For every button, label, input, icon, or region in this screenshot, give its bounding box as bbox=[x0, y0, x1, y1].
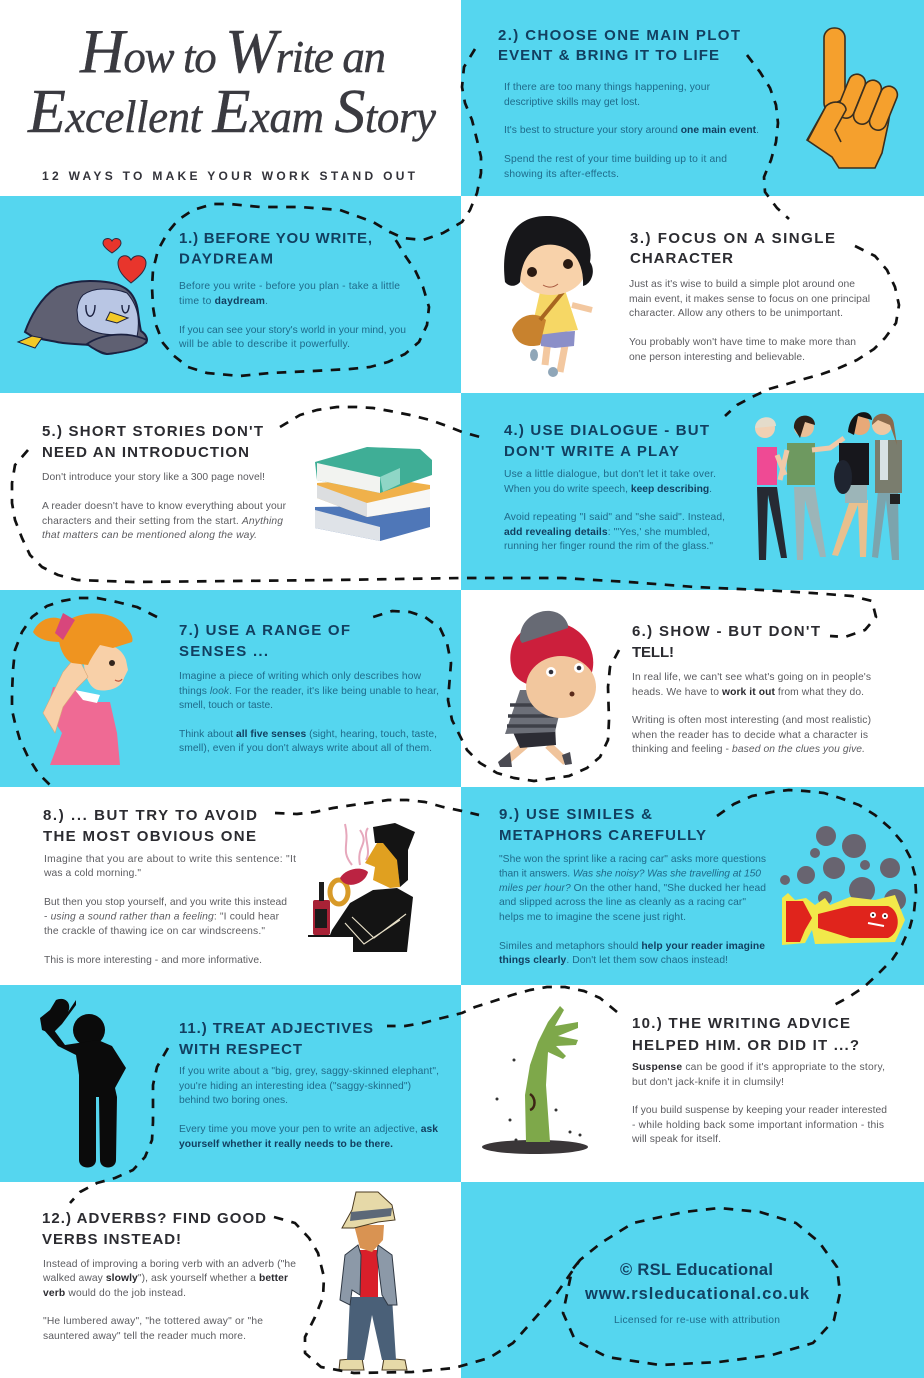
panel: 12 adverbs bbox=[0, 1182, 461, 1378]
panel: 7 range of senses bbox=[0, 590, 461, 787]
icon: sleeping penguin with hearts bbox=[18, 239, 147, 354]
text block 1: Before you write - before you plan - take a little bbox=[179, 281, 400, 292]
heading 1 bbox=[179, 230, 372, 268]
heading 10: HELPED HIM. OR DID IT ...? bbox=[632, 1037, 859, 1054]
panel: 10 writing advice bbox=[461, 985, 924, 1182]
heading 7: 7.) USE A RANGE OF bbox=[179, 622, 350, 639]
heading 3: 3.) FOCUS ON A SINGLE bbox=[630, 230, 835, 247]
text block 11: If you write about a "big, grey, saggy-skinned elephant", bbox=[179, 1066, 439, 1077]
heading 8 bbox=[43, 807, 257, 845]
text block 8: Imagine that you are about to write this sentence: "It bbox=[44, 854, 296, 865]
text block 12: Instead of improving a boring verb with an adverb ("he bbox=[43, 1259, 296, 1270]
icon: man smelling wine bbox=[308, 823, 415, 952]
text block 8: This is more interesting - and more informative. bbox=[44, 955, 262, 966]
heading 5 bbox=[42, 423, 263, 461]
text block 6: thinking and feeling - based on the clues you give. bbox=[632, 744, 865, 755]
text block 5 bbox=[42, 472, 287, 541]
heading 8: THE MOST OBVIOUS ONE bbox=[43, 828, 256, 845]
panel: 4 use dialogue bbox=[461, 393, 924, 590]
heading 10 bbox=[632, 1015, 859, 1054]
text block 11 bbox=[179, 1066, 439, 1150]
icon: man in hat bbox=[339, 1192, 407, 1370]
text block 1 bbox=[178, 281, 406, 350]
text block 9: miles per hour? On the other hand, "She ducked her head bbox=[499, 883, 766, 894]
icon: girl listening bbox=[33, 613, 133, 765]
text block 5: A reader doesn't have to know everything about your bbox=[42, 501, 287, 512]
text block 3: character. Allow any others to be unimportant. bbox=[629, 308, 843, 319]
text block 11: yourself whether it really needs to be there. bbox=[179, 1139, 393, 1150]
icon: pointing hand bbox=[807, 28, 900, 168]
text block 9: "She won the sprint like a racing car" asks more questions bbox=[499, 854, 766, 865]
text block 2: descriptive skills may get lost. bbox=[504, 97, 640, 108]
text block 1: If you can see your story's world in your mind, you bbox=[179, 325, 406, 336]
text block 10: but don't jack-knife it in clumsily! bbox=[632, 1077, 784, 1088]
text block 5: that matters can be mentioned along the way. bbox=[42, 530, 257, 541]
heading 11: 11.) TREAT ADJECTIVES bbox=[179, 1020, 373, 1037]
heading 7: SENSES ... bbox=[179, 643, 268, 660]
heading 5: NEED AN INTRODUCTION bbox=[42, 444, 249, 461]
heading 8: 8.) ... BUT TRY TO AVOID bbox=[43, 807, 257, 824]
text block 3: You probably won't have time to make more than bbox=[629, 337, 856, 348]
text block 7: smell), even if you don't always write about all of them. bbox=[179, 743, 432, 754]
icon: sneaking boy bbox=[498, 611, 596, 767]
heading 7 bbox=[179, 622, 350, 660]
text block 12: verb would do the job instead. bbox=[43, 1288, 186, 1299]
text block 9: Similes and metaphors should help your reader imagine bbox=[499, 941, 765, 952]
text block 10 bbox=[631, 1062, 887, 1145]
text block 9: than it answers. Was she noisy? Was she travelling at 150 bbox=[499, 868, 761, 880]
panel: 1 before you write bbox=[0, 196, 461, 393]
text block 7: Think about all five senses (sight, hearing, touch, taste, bbox=[179, 729, 437, 740]
heading 3 bbox=[630, 230, 835, 267]
text block 6: In real life, we can't see what's going on in people's bbox=[632, 672, 871, 683]
icon: girl with bag bbox=[504, 216, 593, 377]
credit: licence note: Licensed for re-use with attribution bbox=[614, 1315, 780, 1326]
text block 6: Writing is often most interesting (and most realistic) bbox=[632, 715, 871, 726]
heading 6 bbox=[632, 623, 820, 661]
text block 10: Suspense can be good if it's appropriate to the story, bbox=[632, 1062, 885, 1073]
text block 3: main event, it makes sense to focus on one principal bbox=[629, 294, 870, 305]
heading 9 bbox=[499, 806, 706, 844]
panel: 11 treat adjectives with respect bbox=[0, 985, 461, 1182]
text block 8 bbox=[43, 854, 296, 966]
heading 1: 1.) BEFORE YOU WRITE, bbox=[179, 230, 372, 247]
text block 6: when the reader has to decide what a character is bbox=[631, 730, 868, 741]
heading 12: VERBS INSTEAD! bbox=[42, 1231, 181, 1248]
credit: website: www.rsleducational.co.uk bbox=[584, 1285, 810, 1303]
icon: man raising hat bbox=[40, 999, 126, 1168]
text block 1: will be able to describe it powerfully. bbox=[178, 339, 350, 350]
title bbox=[27, 18, 436, 146]
text block 11: behind two boring ones. bbox=[179, 1095, 288, 1106]
title: Excellent Exam Story bbox=[27, 78, 436, 146]
text block 5: Don't introduce your story like a 300 page novel! bbox=[42, 472, 265, 483]
panel: 5 short stories bbox=[0, 393, 461, 590]
text block 10: If you build suspense by keeping your reader interested bbox=[632, 1105, 887, 1116]
heading 1: DAYDREAM bbox=[179, 250, 273, 268]
text block 7: Imagine a piece of writing which only describes how bbox=[179, 671, 422, 682]
icon: zombie hand rising bbox=[482, 1006, 588, 1154]
text block 4: When you do write speech, keep describing. bbox=[504, 484, 712, 495]
text block 6 bbox=[631, 672, 871, 755]
text block 4: Use a little dialogue, but don't let it take over. bbox=[504, 469, 716, 480]
heading 6: 6.) SHOW - BUT DON'T bbox=[632, 623, 820, 640]
text block 9: and slipped across the line as cleanly as a racing car" bbox=[499, 897, 746, 908]
text block 9: helps me to imagine the scene just right. bbox=[499, 912, 686, 923]
credit: copyright: © RSL Educational bbox=[620, 1261, 773, 1279]
panel: 2 choose one main plot event bbox=[461, 0, 924, 196]
subtitle: 12 WAYS TO MAKE YOUR WORK STAND OUT bbox=[42, 169, 416, 183]
text block 10: will speak for itself. bbox=[631, 1134, 721, 1145]
text block 3: one person interesting and believable. bbox=[629, 352, 805, 363]
heading 11: WITH RESPECT bbox=[179, 1041, 302, 1058]
text block 2: If there are too many things happening, your bbox=[504, 82, 711, 93]
text block 12: sauntered away" tell the reader much more. bbox=[43, 1331, 246, 1342]
panel: title bbox=[0, 0, 461, 196]
text block 8: the crackle of thawing ice on car windscreens." bbox=[44, 926, 265, 937]
heading 9: METAPHORS CAREFULLY bbox=[499, 827, 706, 844]
text block 4: add revealing details: "'Yes,' she mumbled, bbox=[504, 527, 710, 538]
panel: 9 similes and metaphors bbox=[461, 787, 924, 985]
heading 9: 9.) USE SIMILES & bbox=[499, 806, 652, 823]
heading 4: 4.) USE DIALOGUE - BUT bbox=[504, 422, 709, 439]
text block 12: "He lumbered away", "he tottered away" or "he bbox=[43, 1316, 263, 1327]
text block 5: characters and their setting from the start. Anything bbox=[42, 516, 283, 527]
text block 4: Avoid repeating "I said" and "she said". Instead, bbox=[504, 512, 725, 523]
text block 9: things clearly. Don't let them sow chaos instead! bbox=[499, 955, 728, 966]
heading 3: CHARACTER bbox=[630, 250, 733, 267]
heading 11 bbox=[179, 1020, 373, 1058]
text block 10: - while holding back some important information - this bbox=[632, 1120, 884, 1131]
heading 2: EVENT & BRING IT TO LIFE bbox=[498, 47, 719, 64]
text block 3: Just as it's wise to build a simple plot around one bbox=[629, 279, 855, 290]
text block 8: was a cold morning." bbox=[43, 868, 141, 879]
heading 6: TELL! bbox=[632, 644, 674, 661]
title: How to Write an bbox=[79, 18, 386, 86]
panel: credits bbox=[461, 1182, 924, 1378]
heading 5: 5.) SHORT STORIES DON'T bbox=[42, 423, 263, 440]
heading 12 bbox=[42, 1210, 266, 1248]
text block 11: you're hiding an interesting idea ("saggy-skinned") bbox=[179, 1081, 411, 1092]
text block 4: running her finger round the rim of the glass." bbox=[504, 541, 713, 552]
text block 7: smell, touch or taste. bbox=[179, 700, 273, 711]
heading 12: 12.) ADVERBS? FIND GOOD bbox=[42, 1210, 266, 1227]
text block 7 bbox=[179, 671, 439, 754]
text block 3 bbox=[629, 279, 870, 363]
panel: 3 focus on a single character bbox=[461, 196, 924, 393]
text block 12 bbox=[42, 1259, 296, 1342]
text block 2: showing its after-effects. bbox=[504, 169, 619, 180]
text block 2 bbox=[504, 82, 759, 180]
panel: 8 avoid the most obvious one bbox=[0, 787, 461, 985]
icon: burning bomb and smoke bbox=[780, 826, 906, 945]
heading 4 bbox=[504, 422, 709, 460]
heading 10: 10.) THE WRITING ADVICE bbox=[632, 1015, 850, 1032]
text block 8: But then you stop yourself, and you write this instead bbox=[44, 897, 287, 908]
text block 9 bbox=[499, 854, 766, 966]
icon: four women talking bbox=[755, 412, 902, 560]
text block 1: time to daydream. bbox=[179, 296, 268, 307]
text block 4 bbox=[504, 469, 725, 552]
text block 2: Spend the rest of your time building up to it and bbox=[504, 154, 727, 165]
text block 12: walked away slowly"), ask yourself whether a better bbox=[42, 1273, 288, 1284]
heading 2: 2.) CHOOSE ONE MAIN PLOT bbox=[498, 27, 740, 44]
text block 6: heads. We have to work it out from what they do. bbox=[632, 687, 864, 698]
icon: stack of books bbox=[315, 447, 432, 541]
heading 2 bbox=[498, 27, 740, 64]
panel: 6 show but don't tell bbox=[461, 590, 924, 787]
text block 2: It's best to structure your story around one main event. bbox=[504, 125, 759, 136]
text block 7: things look. For the reader, it's like being unable to hear, bbox=[179, 686, 439, 697]
text block 11: Every time you move your pen to write an adjective, ask bbox=[179, 1124, 438, 1135]
text block 8: - using a sound rather than a feeling: "I could hear bbox=[44, 912, 280, 922]
heading 4: DON'T WRITE A PLAY bbox=[504, 443, 679, 460]
